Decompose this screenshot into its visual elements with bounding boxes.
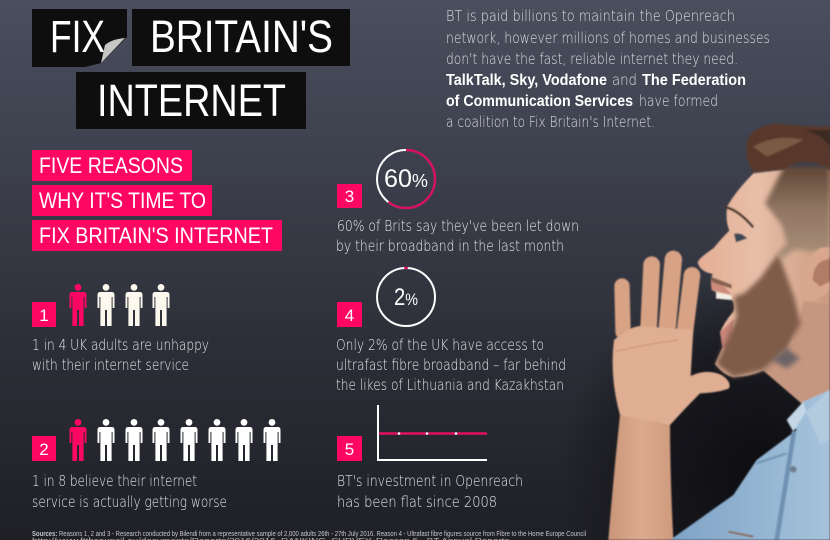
donut: 60%: 60% — [384, 165, 428, 193]
number badge 4: 4 — [345, 306, 354, 325]
text: reason 2: service is actually getting worse — [32, 493, 227, 511]
text: reason 3: 60% of Brits say they've been let down — [337, 217, 579, 235]
number badge 2 — [32, 436, 56, 461]
number badge 2: 2 — [39, 440, 49, 459]
title box: FIX with peeled corner — [32, 9, 127, 67]
reason 3 — [336, 150, 579, 255]
heading: five reasons — [32, 150, 282, 251]
intro paragraph — [446, 7, 770, 131]
text: reason 5: has been flat since 2008 — [337, 493, 497, 511]
intro paragraph: have formed — [639, 92, 718, 110]
beard — [716, 253, 801, 377]
donut: 2% — [375, 266, 437, 328]
donut: 60% — [377, 150, 435, 208]
line chart: flat investment — [378, 405, 487, 460]
intro paragraph: and — [612, 71, 637, 89]
eye — [734, 233, 747, 242]
shirt — [670, 390, 830, 540]
intro paragraph: network, however millions of homes and businesses — [446, 29, 770, 47]
number badge 1: 1 — [39, 306, 49, 325]
title — [32, 9, 350, 129]
number badge 4 — [337, 302, 362, 327]
ear — [803, 247, 830, 301]
moustache — [711, 277, 732, 289]
intro paragraph: TalkTalk, Sky, Vodafone — [446, 72, 607, 89]
text: reason 5: BT's investment in Openreach — [337, 472, 523, 490]
reason 2 — [32, 419, 280, 511]
top hair — [746, 123, 830, 172]
intro paragraph: of Communication Services — [446, 93, 633, 110]
eyebrow — [726, 207, 753, 227]
stubble on neck — [772, 348, 800, 368]
text: reason 2: 1 in 8 believe their internet — [32, 472, 197, 490]
number badge 3: 3 — [345, 187, 354, 206]
text: reason 1: 1 in 4 UK adults are unhappy — [32, 336, 209, 354]
text: reason 2 — [32, 472, 227, 511]
teeth — [716, 292, 732, 300]
icon row: 1 in 4 people — [70, 284, 170, 326]
sources footnote: Sources: Reasons 1, 2 and 3 - Research conducted by Bilendi from a representative sample of 2,000 adults 26th - 27th July 2016. Reason 4 - Ultrafast fibre figures source from Fibre to the Home Europe Council — [32, 531, 586, 538]
reason 4 — [336, 266, 566, 394]
heading: five reasons: FIVE REASONS — [39, 153, 183, 178]
number badge 3 — [337, 184, 362, 208]
neck shadow — [763, 302, 830, 405]
photo: shouting man with raised hand — [608, 123, 830, 540]
text: reason 4 — [336, 336, 566, 394]
intro paragraph: BT is paid billions to maintain the Openreach — [446, 7, 735, 25]
side hair — [765, 167, 830, 260]
reason 5 — [337, 405, 523, 511]
forearm — [608, 415, 673, 540]
hand — [613, 259, 730, 425]
heading: five reasons: WHY IT'S TIME TO — [39, 188, 206, 213]
reason 1 — [32, 284, 209, 374]
intro paragraph: The Federation — [642, 72, 746, 89]
text: reason 1 — [32, 336, 209, 374]
text: reason 5 — [337, 472, 523, 511]
title box: BRITAIN'S: BRITAIN'S — [150, 11, 333, 62]
sources footnote — [32, 531, 586, 540]
intro paragraph: a coalition to Fix Britain's Internet. — [446, 113, 655, 131]
text: reason 3 — [336, 217, 579, 255]
icon row: 1 in 8 people — [70, 419, 280, 461]
title box: INTERNET: INTERNET — [97, 75, 286, 126]
number badge 1 — [32, 302, 56, 327]
title box: FIX with peeled corner: FIX — [50, 11, 105, 62]
text: reason 1: with their internet service — [32, 356, 189, 374]
text: reason 4: the likes of Lithuania and Kazakhstan — [336, 376, 564, 394]
intro paragraph: don't have the fast, reliable internet they need. — [446, 50, 738, 68]
text: reason 4: ultrafast fibre broadband – far behind — [336, 356, 566, 374]
heading: five reasons: FIX BRITAIN'S INTERNET — [39, 223, 273, 248]
text: reason 3: by their broadband in the last month — [336, 237, 564, 255]
text: reason 4: Only 2% of the UK have access to — [336, 336, 544, 354]
donut: 2%: 2% — [394, 284, 418, 311]
number badge 5 — [337, 436, 362, 461]
number badge 5: 5 — [345, 440, 354, 459]
neck and face — [698, 170, 830, 405]
lips — [711, 282, 732, 295]
